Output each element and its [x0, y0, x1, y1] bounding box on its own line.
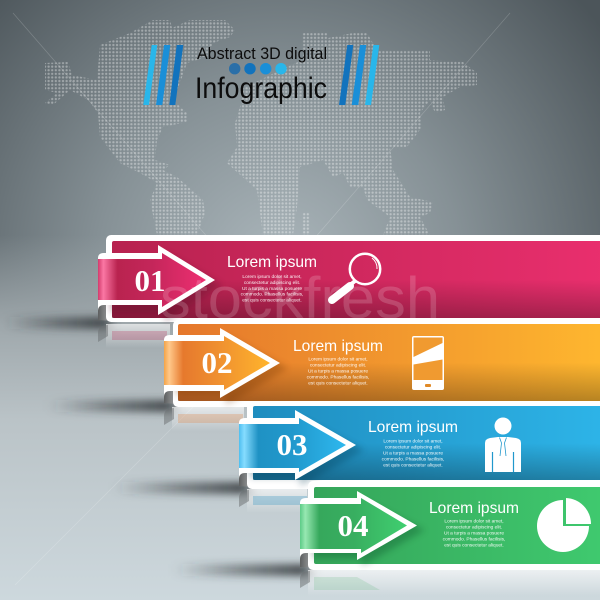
- body text: commodo. Phasellus facilisis,: [382, 456, 444, 462]
- body text: [382, 438, 444, 468]
- arrow fill: [164, 336, 270, 390]
- title block: [143, 44, 379, 105]
- faint diagonal lines: [13, 13, 510, 585]
- icon: smartphone: [412, 336, 444, 390]
- body text: [307, 356, 369, 386]
- banner 4: [300, 481, 600, 570]
- body text: [241, 274, 303, 304]
- curl: [239, 468, 253, 487]
- body text: est quis consectetur aliquet.: [444, 542, 504, 548]
- background floor: [0, 323, 600, 600]
- number 04: 04: [338, 508, 368, 543]
- arrow outline: [164, 328, 280, 398]
- icon: magnifying glass: [332, 254, 380, 300]
- body text: Lorem ipsum dolor sit amet,: [242, 274, 302, 280]
- color panel: [253, 406, 600, 480]
- body text: consectetur adipiscing elit.: [385, 444, 441, 450]
- number 01: 01: [134, 263, 166, 298]
- panel shading: [253, 406, 600, 480]
- curl: [164, 385, 178, 404]
- body text: Lorem ipsum dolor sit amet,: [308, 356, 368, 362]
- number 02: 02: [202, 345, 232, 380]
- heading: Lorem ipsum: [227, 254, 317, 271]
- white frame: [173, 320, 600, 407]
- white frame: [106, 235, 600, 322]
- dotted world map: [45, 20, 477, 235]
- panel shading: [178, 324, 600, 401]
- body text: est quis consectetur aliquet.: [383, 462, 443, 468]
- color panel: [112, 241, 600, 318]
- reflection of banner 4: [300, 570, 600, 596]
- arrow fill: [300, 498, 407, 553]
- color panel: [314, 487, 600, 564]
- banner 2: [164, 320, 600, 407]
- body text: est quis consectetur aliquet.: [308, 380, 368, 386]
- arrow outline: [239, 410, 356, 480]
- white frame: [308, 481, 600, 570]
- heading: Lorem ipsum: [293, 338, 383, 355]
- curl: [98, 302, 112, 321]
- heading: Lorem ipsum: [368, 419, 458, 436]
- panel shading: [112, 241, 600, 318]
- horizon blend: [0, 235, 600, 324]
- body text: Ut a turpis a massa posuere: [444, 530, 504, 536]
- body text: consectetur adipiscing elit.: [310, 362, 366, 368]
- arrow shadow: [312, 500, 425, 566]
- body text: Lorem ipsum dolor sit amet,: [444, 518, 504, 524]
- icon: pie chart: [537, 498, 591, 552]
- arrow outline: [98, 245, 215, 315]
- body text: Ut a turpis a massa posuere: [383, 450, 443, 456]
- body text: Lorem ipsum dolor sit amet,: [383, 438, 443, 444]
- heading: Lorem ipsum: [429, 500, 519, 517]
- arrow shadow: [250, 418, 364, 486]
- body text: [443, 518, 505, 548]
- white frame: [247, 402, 600, 489]
- number 03: 03: [276, 427, 308, 462]
- color panel: [178, 324, 600, 401]
- floor shadows: [5, 317, 310, 576]
- watermark: stockfresh: [160, 266, 440, 331]
- right blue stripes: [339, 45, 379, 105]
- reflection of banner 1: [98, 324, 170, 348]
- body text: consectetur adipiscing elit.: [244, 280, 300, 286]
- body text: commodo. Phasellus facilisis,: [307, 374, 369, 380]
- curl: [300, 549, 314, 568]
- arrow fill: [239, 418, 346, 472]
- four blue dots: [229, 63, 287, 74]
- arrow fill: [98, 253, 206, 307]
- icon: businessman: [485, 418, 521, 472]
- body text: commodo. Phasellus facilisis,: [241, 292, 303, 298]
- banner 3: [239, 402, 600, 489]
- body text: Ut a turpis a massa posuere: [308, 368, 368, 374]
- heading line 1: Abstract 3D digital: [197, 44, 327, 63]
- body text: est quis consectetur aliquet.: [242, 298, 302, 304]
- background wall: [0, 0, 600, 325]
- reflection of banner 2: [164, 407, 244, 431]
- heading line 2: Infographic: [195, 72, 327, 105]
- arrow shadow: [176, 335, 288, 405]
- reflection of banner 3: [239, 489, 307, 513]
- left blue stripes: [143, 45, 183, 105]
- arrow outline: [300, 491, 417, 560]
- body text: commodo. Phasellus facilisis,: [443, 536, 505, 542]
- arrow shadow: [110, 252, 222, 322]
- body text: consectetur adipiscing elit.: [446, 524, 502, 530]
- body text: Ut a turpis a massa posuere: [242, 286, 302, 292]
- banner 1: [98, 235, 600, 322]
